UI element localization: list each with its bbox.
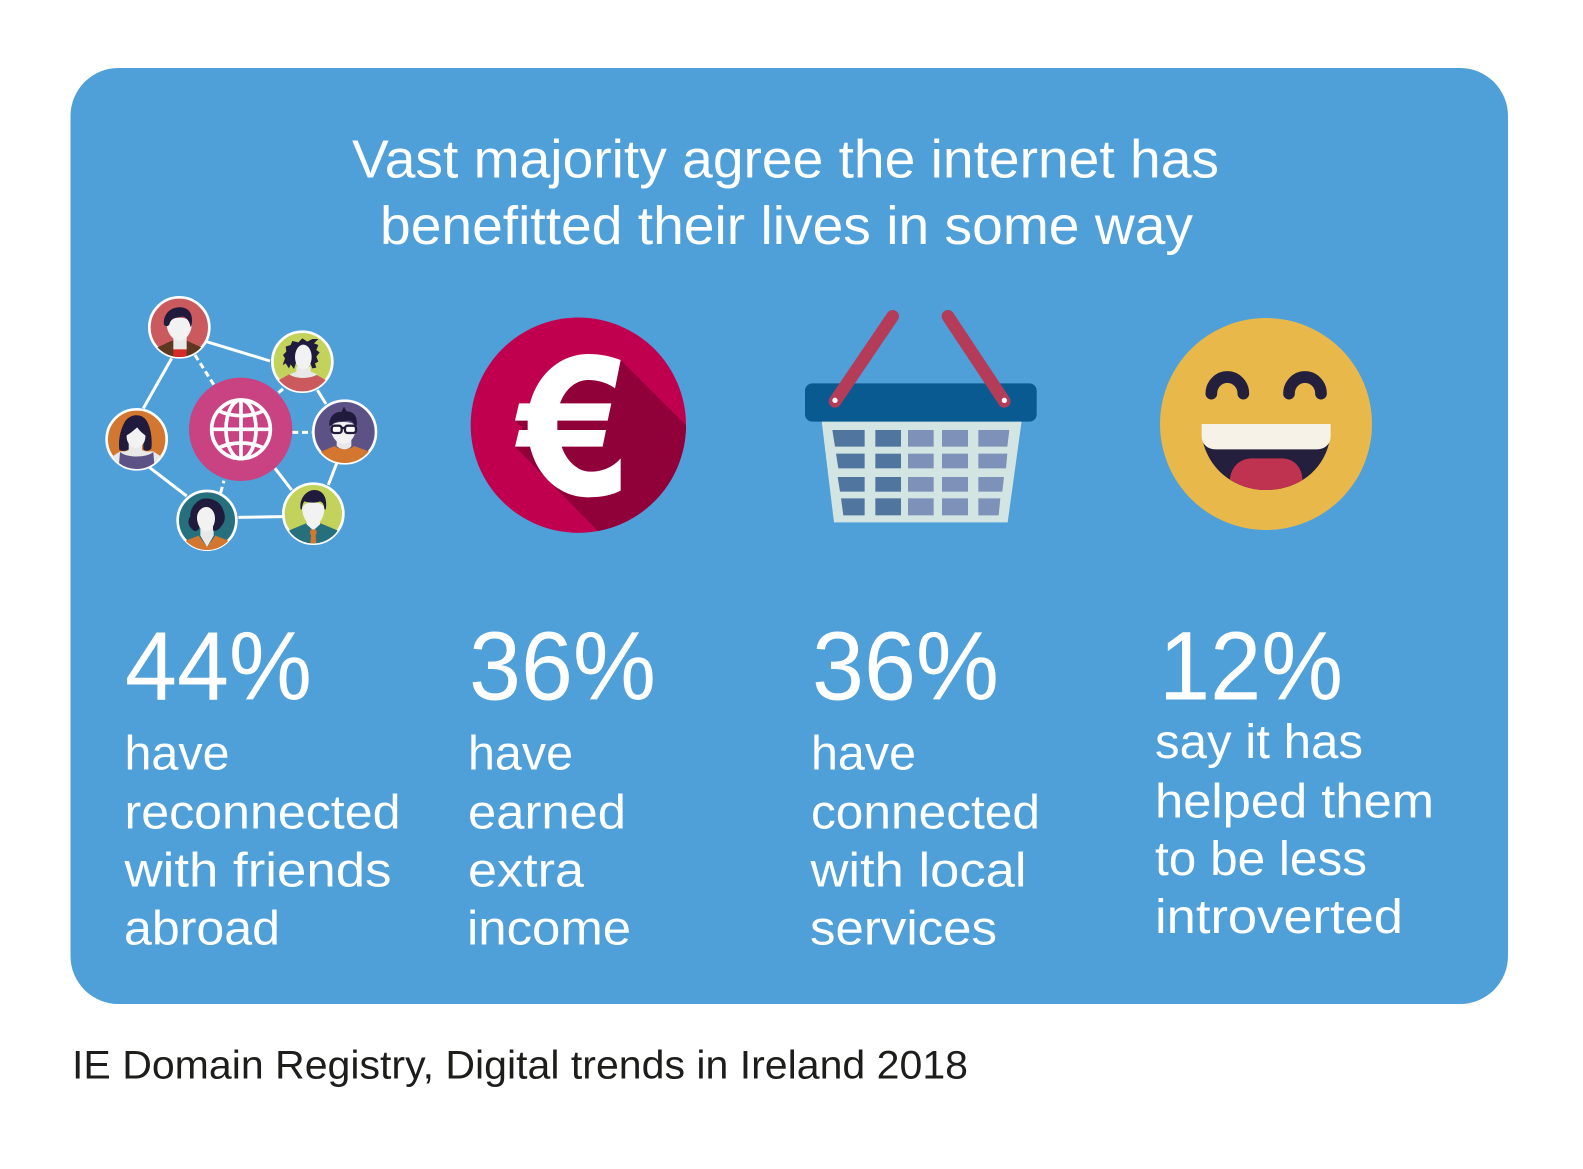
title xyxy=(352,130,1219,256)
stat: 36% extra income: 36% xyxy=(469,611,656,720)
source note: IE Domain Registry, Digital trends in Ireland 2018 xyxy=(72,1044,968,1088)
stat: 36% extra income: extra xyxy=(468,845,584,898)
panel: blue background xyxy=(70,68,1508,1004)
icon: laughing face xyxy=(1160,318,1372,530)
stat: 36% local services: services xyxy=(810,902,997,955)
icon: shopping basket xyxy=(805,316,1037,522)
globe hub xyxy=(189,378,292,481)
basket handles xyxy=(835,316,1004,401)
stat: 12% less introverted: helped them xyxy=(1155,775,1434,828)
teeth xyxy=(1202,424,1331,449)
basket grid xyxy=(832,430,901,515)
infographic xyxy=(70,68,1508,1087)
stat: 36% extra income: have xyxy=(468,727,573,780)
basket body xyxy=(822,421,1022,522)
stat: 12% less introverted: to be less xyxy=(1155,833,1367,886)
avatar: man with tie xyxy=(283,484,343,547)
stat: 12% less introverted: introverted xyxy=(1155,891,1403,944)
stat: 36% local services: have xyxy=(811,727,916,780)
stat: 36% local services: 36% xyxy=(812,611,999,720)
avatar: man in brown jacket xyxy=(149,297,209,361)
eyes xyxy=(1211,377,1321,394)
stat: 44% reconnected: have xyxy=(124,727,230,780)
stat: 36% local services: with local xyxy=(809,845,1026,898)
stat: 36% extra income: income xyxy=(467,902,631,955)
connecting lines xyxy=(143,342,337,517)
tongue xyxy=(1230,458,1302,493)
stat: 44% reconnected: reconnected xyxy=(124,786,400,839)
avatar: man with glasses xyxy=(313,401,376,465)
stat: 44% reconnected: with friends xyxy=(123,845,392,898)
stat: 36% local services xyxy=(809,611,1040,955)
stat: 12% less introverted: 12% xyxy=(1159,611,1343,720)
avatar: woman with wavy hair xyxy=(178,491,236,554)
avatar: woman with long hair xyxy=(107,409,167,473)
avatar: woman with spiky hair xyxy=(272,332,332,395)
stat: 12% less introverted: say it has xyxy=(1155,716,1363,769)
mouth xyxy=(1203,443,1329,490)
stat: 44% reconnected: abroad xyxy=(124,902,280,955)
title: Vast majority agree the internet has xyxy=(352,130,1219,190)
icon: euro coin xyxy=(471,317,691,542)
basket rim xyxy=(805,383,1037,422)
icon: social network xyxy=(107,297,376,554)
title: benefitted their lives in some way xyxy=(380,196,1193,256)
stat: 36% local services: connected xyxy=(811,786,1040,839)
stat: 44% reconnected: 44% xyxy=(125,611,312,720)
stat: 36% extra income: earned xyxy=(468,786,626,839)
stat: 44% reconnected xyxy=(123,611,400,955)
stat: 36% extra income xyxy=(467,611,656,955)
stat: 12% less introverted xyxy=(1155,611,1434,944)
